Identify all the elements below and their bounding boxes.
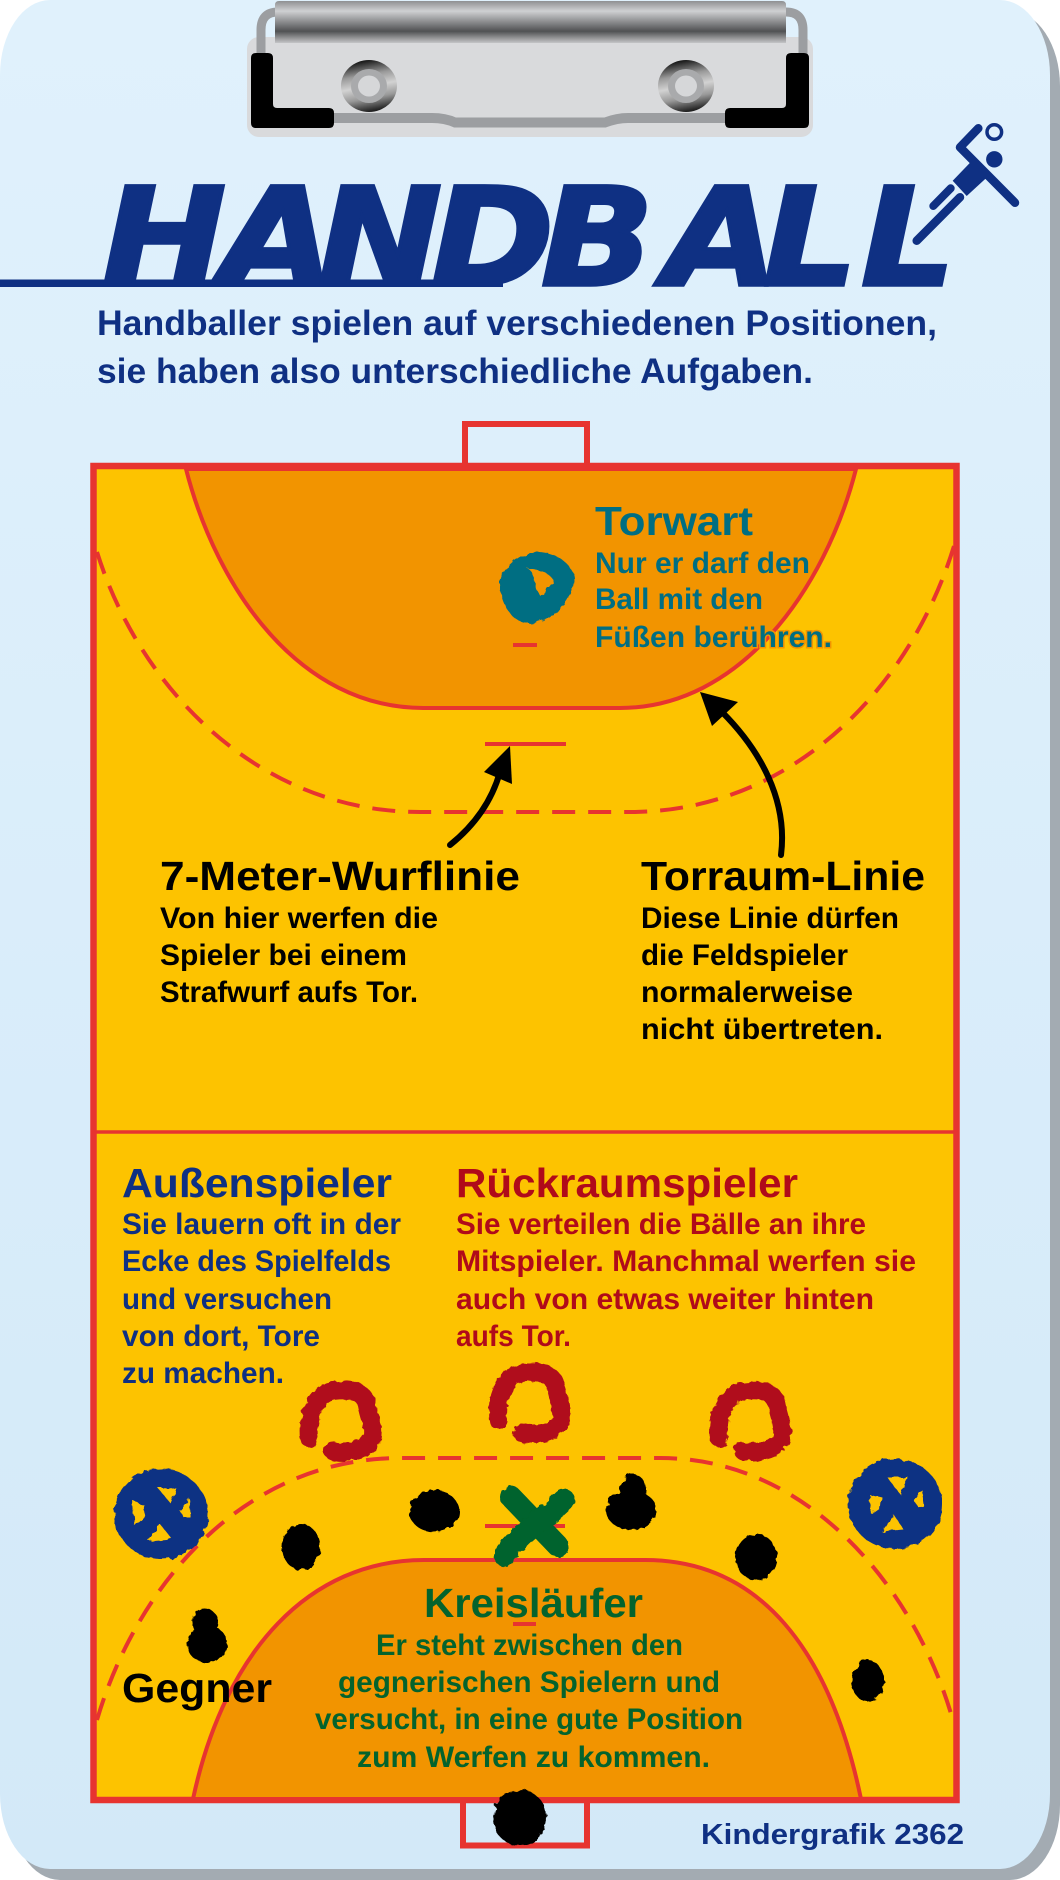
label: Kreisläufer: Er steht zwischen den [376,1629,683,1662]
intro text [97,304,937,391]
top keeper line [513,643,537,647]
arrow: goal area line [700,692,782,855]
label: Rückraumspieler: Sie verteilen die Bälle an ihre [456,1208,866,1241]
label: Torraum-Linie [641,853,925,1046]
label: Außenspieler: Sie lauern oft in der [122,1208,401,1241]
label: Außenspieler: und versuchen [122,1283,332,1316]
label: Torraum-Linie: Diese Linie dürfen [641,902,899,935]
bottom 7 meter line [485,1524,565,1528]
bottom free throw line [97,1458,952,1720]
bottom keeper line [513,1622,536,1626]
label: Kreisläufer: zum Werfen zu kommen. [357,1741,710,1774]
label: Torraum-Linie: Torraum-Linie [641,853,925,899]
handball field [94,424,956,1846]
intro text: Handballer spielen auf verschiedenen Positionen, [97,304,937,343]
intro text: sie haben also unterschiedliche Aufgaben. [97,352,813,391]
label: 7-Meter-Wurflinie: 7-Meter-Wurflinie [160,853,520,899]
markers: opponents [187,1474,884,1846]
label: Kreisläufer [315,1580,743,1774]
marker: goalkeeper [500,552,574,623]
label: Rückraumspieler: aufs Tor. [456,1320,571,1353]
label: Kreisläufer: versucht, in eine gute Position [315,1703,743,1736]
halfway line [96,1130,954,1134]
label: Rückraumspieler [456,1160,916,1353]
title: HANDBALL: HANDBALL [102,159,955,318]
label: 7-Meter-Wurflinie: Spieler bei einem [160,939,407,972]
clipboard clip [247,1,813,137]
top free throw line [97,546,954,812]
label: Rückraumspieler: Rückraumspieler [456,1160,798,1206]
label: 7-Meter-Wurflinie: Strafwurf aufs Tor. [160,976,418,1009]
bottom goal area [193,1560,861,1799]
label: 7-Meter-Wurflinie [160,853,520,1009]
top goal [465,424,587,466]
label: Außenspieler [122,1160,401,1390]
markers: wing players [114,1459,942,1559]
credit: Kindergrafik 2362 [701,1819,964,1851]
bottom goal [463,1800,587,1846]
label: Kreisläufer: Kreisläufer [424,1580,643,1626]
label: Torwart: Füßen berühren. [595,621,832,654]
label: Kreisläufer: gegnerischen Spielern und [338,1666,720,1699]
label: Torraum-Linie: normalerweise [641,976,853,1009]
icon: handball player [917,125,1015,241]
label: Außenspieler: zu machen. [122,1357,284,1390]
field surface [94,466,956,1800]
label: Torwart [595,498,832,654]
label: Rückraumspieler: auch von etwas weiter hinten [456,1283,874,1316]
arrow: 7 meter line [450,746,512,845]
label: Torwart: Torwart [595,498,753,544]
label: Außenspieler: von dort, Tore [122,1320,320,1353]
label: Torwart: Ball mit den [595,583,763,616]
label: Außenspieler: Ecke des Spielfelds [122,1245,391,1278]
markers: back court players [309,1372,782,1452]
marker: pivot player [505,1497,564,1556]
top goal area [186,469,856,708]
label: Torraum-Linie: nicht übertreten. [641,1013,883,1046]
top 7 meter line [485,742,566,746]
label: Torwart: Nur er darf den [595,547,810,580]
label: Außenspieler: Außenspieler [122,1160,392,1206]
label: Torraum-Linie: die Feldspieler [641,939,848,972]
label: Rückraumspieler: Mitspieler. Manchmal werfen sie [456,1245,916,1278]
label: 7-Meter-Wurflinie: Von hier werfen die [160,902,438,935]
label: Gegner: Gegner [122,1665,272,1711]
